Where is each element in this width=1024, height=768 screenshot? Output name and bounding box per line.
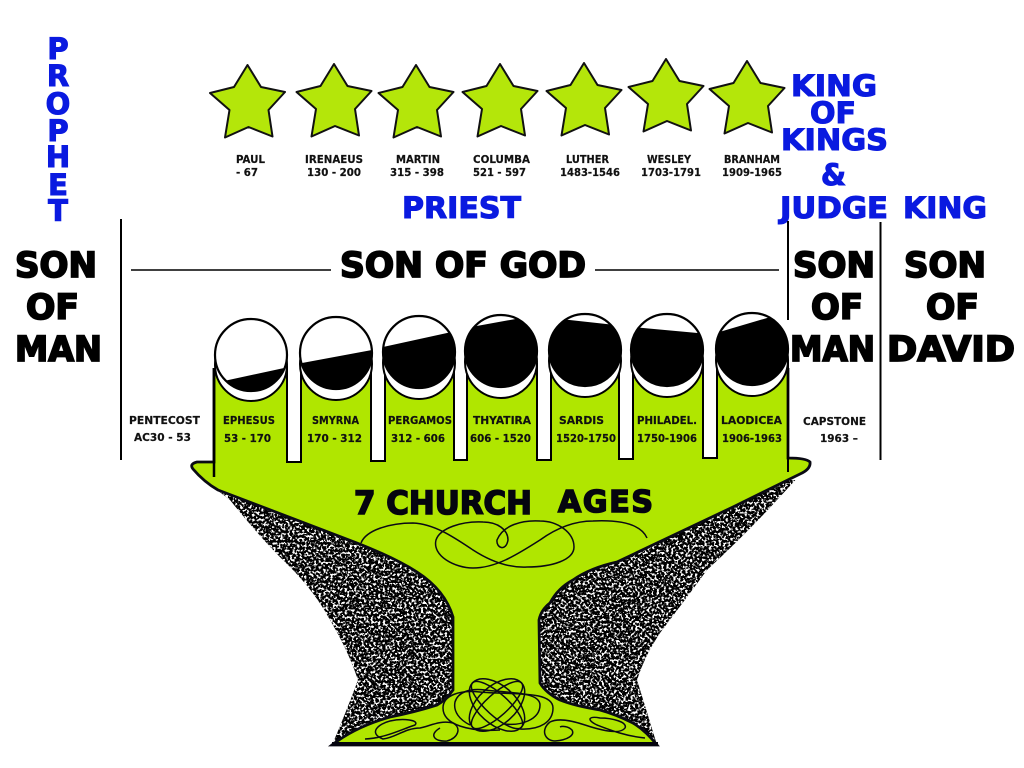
vertical heading: PROPHET: O <box>46 87 70 121</box>
star labels: IRENAEUS <box>305 153 363 166</box>
heading: King of Kings & Judge: KINGS <box>781 123 888 157</box>
speckled shading <box>200 480 820 750</box>
star labels: 1703-1791 <box>641 166 701 179</box>
star: Martin <box>378 65 454 138</box>
heading: King of Kings & Judge: KING <box>791 69 877 103</box>
vertical heading: PROPHET: E <box>48 168 68 202</box>
star labels: WESLEY <box>647 153 692 166</box>
star labels: COLUMBA <box>473 153 530 166</box>
church age labels: PHILADEL. <box>637 414 697 427</box>
green candlestick body <box>192 368 810 745</box>
star labels: BRANHAM <box>724 153 780 166</box>
star labels: 521 - 597 <box>473 166 526 179</box>
vertical heading: PROPHET: H <box>46 140 70 174</box>
heading: SON OF MAN (right) <box>790 246 875 370</box>
heading: SON OF DAVID: SON <box>904 246 986 286</box>
church age labels: EPHESUS <box>223 414 275 427</box>
white slots <box>287 362 717 462</box>
heading: SON OF GOD: SON OF GOD <box>340 246 586 286</box>
church age labels <box>223 414 782 445</box>
church age labels: 1750-1906 <box>637 432 697 445</box>
star labels: LUTHER <box>566 153 609 166</box>
church age labels: 170 - 312 <box>307 432 362 445</box>
lamp: Laodicea <box>714 312 790 397</box>
church age labels: THYATIRA <box>473 414 531 427</box>
church age labels: 53 - 170 <box>224 432 271 445</box>
heading: King of Kings & Judge <box>778 69 888 225</box>
vertical heading: PROPHET: P <box>47 114 69 148</box>
star labels: 130 - 200 <box>307 166 361 179</box>
heading: KING: KING <box>903 191 987 225</box>
star labels: 315 - 398 <box>390 166 444 179</box>
heading: SON OF MAN: SON <box>15 246 97 286</box>
heading: SON OF DAVID <box>887 246 1015 370</box>
flourish: upper <box>361 521 647 568</box>
stars row <box>210 59 784 138</box>
label: Capstone: 1963 – <box>820 432 858 445</box>
flourish: lower knot <box>365 669 645 741</box>
star labels: 1483-1546 <box>560 166 620 179</box>
church age labels: PERGAMOS <box>388 414 452 427</box>
church age labels: LAODICEA <box>721 414 782 427</box>
candle lamps <box>210 310 795 401</box>
vertical heading: PROPHET: R <box>47 59 69 93</box>
heading: SON OF MAN (right): SON <box>793 246 875 286</box>
heading: SON OF MAN <box>15 246 102 370</box>
star labels: - 67 <box>236 166 258 179</box>
base bar <box>332 742 658 746</box>
church age labels: 606 - 1520 <box>470 432 531 445</box>
label: Pentecost: PENTECOST <box>129 414 200 427</box>
heading: SON OF MAN (right): MAN <box>790 330 875 370</box>
heading: King of Kings & Judge: JUDGE <box>778 191 888 225</box>
star: Luther <box>546 63 622 136</box>
church age labels: 1520-1750 <box>556 432 616 445</box>
heading: SON OF MAN (right): OF <box>811 288 863 328</box>
church age labels: SARDIS <box>559 414 604 427</box>
star: Paul <box>210 65 285 138</box>
label: Capstone: CAPSTONE <box>803 415 866 428</box>
candlestick <box>192 310 820 750</box>
vertical heading: PROPHET <box>46 32 70 228</box>
star: Wesley <box>628 59 704 132</box>
label: Pentecost <box>129 414 200 444</box>
church age labels: SMYRNA <box>312 414 359 427</box>
vertical heading: PROPHET: T <box>48 194 68 228</box>
star labels: MARTIN <box>396 153 440 166</box>
star: Branham <box>710 61 784 134</box>
label: Pentecost: AC30 - 53 <box>134 431 191 444</box>
star: Irenaeus <box>296 64 372 136</box>
heading: SON OF DAVID: OF <box>926 288 979 328</box>
church age labels: 312 - 606 <box>391 432 445 445</box>
lamp: Smyrna <box>295 317 380 400</box>
vertical heading: PROPHET: P <box>47 32 69 66</box>
label: Capstone <box>803 415 866 445</box>
title: 7 CHURCH AGES <box>354 484 653 522</box>
heading: King of Kings & Judge: OF <box>810 96 856 130</box>
church age labels: 1906-1963 <box>722 432 782 445</box>
lamp: Philadelphia <box>630 312 704 398</box>
heading: PRIEST: PRIEST <box>402 191 521 225</box>
title: 7 CHURCH AGES: 7 CHURCH <box>354 484 532 522</box>
heading: King of Kings & Judge: & <box>821 158 846 192</box>
title: 7 CHURCH AGES: AGES <box>558 485 653 520</box>
star labels: PAUL <box>236 153 265 166</box>
heading: SON OF DAVID: DAVID <box>887 330 1015 370</box>
lamp: Ephesus <box>210 319 295 401</box>
star labels: 1909-1965 <box>722 166 782 179</box>
lamp: Pergamos <box>380 316 460 400</box>
star labels <box>236 153 782 179</box>
heading: SON OF MAN: MAN <box>15 330 102 370</box>
star: Columba <box>462 64 538 136</box>
lamp: Sardis <box>545 314 625 400</box>
lamp: Thyatira <box>464 314 538 399</box>
heading: SON OF MAN: OF <box>26 288 79 328</box>
